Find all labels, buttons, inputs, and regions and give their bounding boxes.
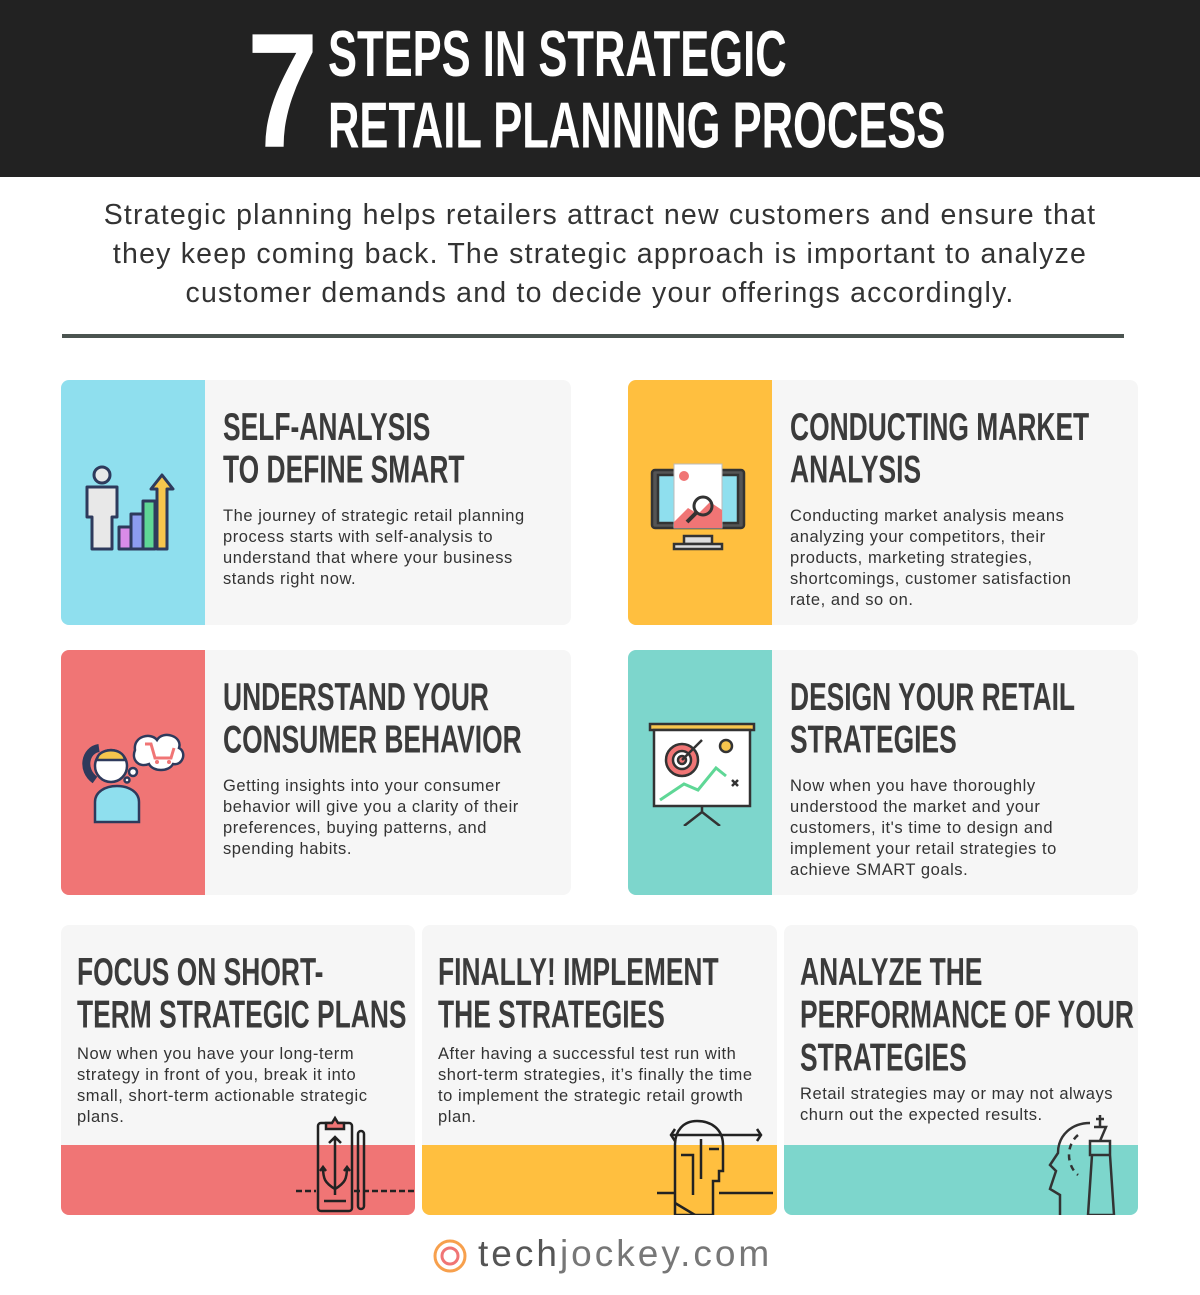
icon: thinking person with cart [82,734,184,824]
intro text: customer demands and to decide your offerings accordingly. [186,277,1014,309]
body text [790,777,1057,879]
title: STEPS IN STRATEGIC [328,17,787,90]
heading [800,951,1134,1080]
heading: UNDERSTAND YOUR [223,676,489,719]
intro text: Strategic planning helps retailers attract new customers and ensure that [104,199,1096,231]
heading: TERM STRATEGIC PLANS [77,994,407,1037]
body text: Getting insights into your consumer [223,777,501,795]
heading [438,951,719,1037]
panel: market analysis [628,380,1138,625]
body text: Retail strategies may or may not always [800,1085,1113,1103]
heading: ANALYSIS [790,449,921,492]
title: RETAIL PLANNING PROCESS [328,88,945,162]
heading: CONSUMER BEHAVIOR [223,719,522,762]
body text: implement your retail strategies to [790,840,1057,858]
logo: techjockey.com [478,1233,772,1274]
body text: process starts with self-analysis to [223,528,493,546]
body text: analyzing your competitors, their [790,528,1046,546]
heading: TO DEFINE SMART [223,449,465,492]
body text [790,507,1072,609]
header bar [0,0,1200,177]
body text: understand that where your business [223,549,513,567]
body text: Conducting market analysis means [790,507,1064,525]
heading [790,406,1089,492]
heading: FINALLY! IMPLEMENT [438,951,719,994]
big number 7: 7 [247,0,318,181]
icon: presentation board with target [648,722,756,826]
panel: short-term plans [61,925,415,1215]
body text: achieve SMART goals. [790,861,968,879]
heading: STRATEGIES [800,1037,967,1080]
body text: small, short-term actionable strategic [77,1087,368,1105]
body text: Now when you have thoroughly [790,777,1036,795]
panel: implement strategies [422,925,777,1215]
panel: design strategies [628,650,1138,895]
icon: person with growth chart [86,466,175,550]
heading: FOCUS ON SHORT- [77,951,323,994]
body text: customers, it's time to design and [790,819,1053,837]
heading: ANALYZE THE [800,951,982,994]
body text [223,777,519,858]
heading: CONDUCTING MARKET [790,406,1089,449]
body text: churn out the expected results. [800,1106,1043,1124]
heading [223,406,465,492]
body text: understood the market and your [790,798,1040,816]
heading: THE STRATEGIES [438,994,665,1037]
body text: strategy in front of you, break it into [77,1066,356,1084]
body text [223,507,525,588]
heading [223,676,522,762]
intro text: they keep coming back. The strategic approach is important to analyze [113,238,1087,270]
body text: spending habits. [223,840,352,858]
body text: plan. [438,1108,477,1126]
body text [438,1045,753,1126]
panel: consumer behavior [61,650,571,895]
body text [800,1085,1113,1124]
body text: The journey of strategic retail planning [223,507,525,525]
body text [77,1045,368,1126]
icon: clipboard with arrows [296,1116,414,1212]
icon: logo mark [434,1240,466,1272]
body text: products, marketing strategies, [790,549,1033,567]
body text: to implement the strategic retail growth [438,1087,743,1105]
heading [77,951,407,1037]
icon: head with chess king [1048,1115,1116,1215]
icon: head with maze [657,1120,773,1215]
icon: monitor with chart [650,464,746,550]
body text: short-term strategies, it’s finally the time [438,1066,753,1084]
intro text [104,199,1096,309]
heading: SELF-ANALYSIS [223,406,430,449]
heading: STRATEGIES [790,719,957,762]
heading [790,676,1075,762]
panel: analyze performance [784,925,1138,1215]
body text: rate, and so on. [790,591,913,609]
body text: After having a successful test run with [438,1045,736,1063]
body text: behavior will give you a clarity of their [223,798,519,816]
title [328,17,945,162]
heading: DESIGN YOUR RETAIL [790,676,1075,719]
heading: PERFORMANCE OF YOUR [800,994,1134,1037]
body text: plans. [77,1108,124,1126]
body text: shortcomings, customer satisfaction [790,570,1072,588]
body text: Now when you have your long-term [77,1045,354,1063]
body text: stands right now. [223,570,356,588]
body text: preferences, buying patterns, and [223,819,487,837]
panel: self-analysis [61,380,571,625]
